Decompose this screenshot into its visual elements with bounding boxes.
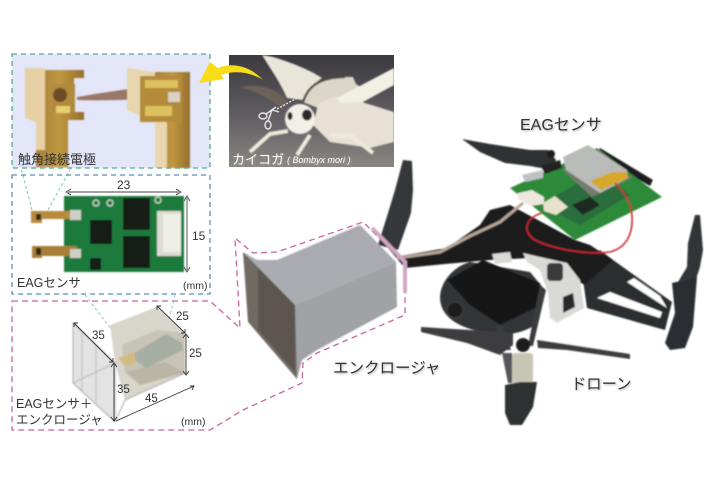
black connector [596, 148, 653, 186]
dimension labels: 25 [189, 348, 202, 360]
dimensions [74, 306, 194, 421]
dimension labels: 35 [117, 384, 130, 396]
dimension labels: 25 [176, 311, 189, 323]
propeller: rear top [462, 139, 556, 170]
label: moth name: カイコガ [232, 152, 284, 167]
camera body [440, 262, 545, 334]
dimension: width 23 [66, 178, 181, 195]
label: moth name [232, 152, 351, 167]
dimension labels: 35 [92, 330, 105, 342]
dimension: height 15 [184, 196, 206, 272]
label: EAG sensor: EAGセンサ [17, 276, 81, 290]
wire: red [527, 183, 632, 253]
connectors: white [518, 190, 544, 206]
arm gaps [597, 278, 667, 318]
green dashed frame [12, 54, 210, 168]
stem [502, 353, 512, 383]
zoom connector lines [85, 295, 175, 348]
zoom connector lines [21, 168, 71, 210]
unit mm: (mm) [183, 280, 208, 292]
icon: scissors [259, 98, 297, 129]
panel: enclosure diagram [12, 222, 405, 430]
propeller: right [675, 215, 703, 287]
enclosure [243, 225, 397, 379]
propeller hub [547, 150, 555, 158]
moth [240, 55, 394, 155]
right electrode [127, 68, 190, 168]
label: sensor + enclosure: エンクロージャ [16, 413, 103, 427]
body frame [378, 205, 613, 285]
battery [563, 145, 628, 193]
white bracket [492, 252, 584, 323]
dimension: height 15: 15 [192, 229, 206, 243]
struts to front motor [495, 285, 546, 350]
3D enclosure [73, 307, 185, 422]
propeller: rear left [378, 160, 413, 250]
arrow: moth to electrode [199, 62, 263, 83]
foot: front [505, 382, 537, 425]
label: drone: ドローン [571, 376, 631, 393]
foot: right [665, 277, 697, 350]
rubber band [372, 228, 405, 293]
black box [447, 260, 540, 325]
label: sensor + enclosure: EAGセンサ＋ [16, 397, 92, 411]
metal shield [563, 150, 632, 197]
propeller: front [421, 327, 630, 359]
unit mm: (mm) [181, 416, 206, 428]
antenna [77, 85, 170, 100]
label: EAG sensor on drone: EAGセンサ [520, 117, 602, 134]
wires: ribbon [397, 203, 523, 258]
label: enclosure: エンクロージャ [333, 359, 440, 377]
panel: EAG sensor board [12, 168, 210, 294]
label: moth name: ( Bombyx mori ) [287, 155, 351, 165]
magenta dashed callout outline [12, 222, 405, 430]
dimension: width 23: 23 [117, 178, 131, 192]
PCB: EAG module [510, 148, 662, 240]
left electrode [25, 68, 84, 167]
drone [243, 139, 703, 425]
PCB [31, 196, 184, 272]
motor: front [512, 353, 533, 384]
arm: right rear [583, 250, 672, 330]
dimension labels [92, 311, 202, 405]
panel: moth photo [229, 55, 394, 167]
blue dashed frame [12, 175, 210, 294]
label: electrode: 触角接続電極 [18, 152, 96, 167]
USB and switch [522, 170, 543, 182]
dimension labels: 45 [145, 393, 158, 405]
panel: antenna electrode photo [12, 54, 210, 168]
